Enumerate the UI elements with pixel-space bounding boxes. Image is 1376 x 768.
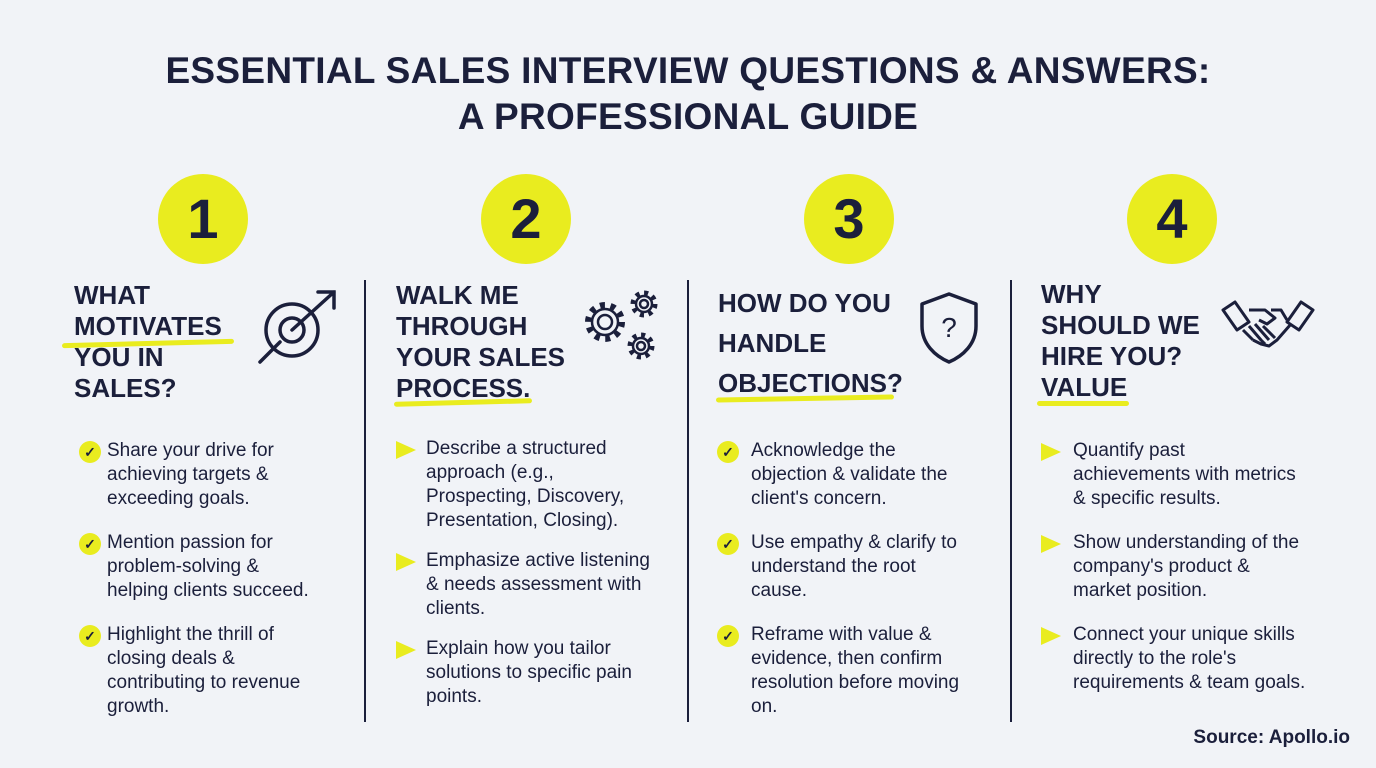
bullet list 1: achieving targets &: [107, 464, 269, 485]
bullet list 4: achievements with metrics: [1073, 464, 1296, 485]
title: ESSENTIAL SALES INTERVIEW QUESTIONS & ANSWERS:: [165, 50, 1211, 91]
heading 4: WHY: [1041, 279, 1102, 309]
number circle 1: 1: [187, 187, 219, 250]
number circle 3: [804, 174, 894, 264]
heading 4: HIRE YOU?: [1041, 341, 1182, 371]
bullet list 2: Emphasize active listening: [426, 550, 650, 571]
bullet list 2: [396, 438, 650, 707]
bullet list 3: Reframe with value &: [751, 624, 932, 645]
icon: shield question: ?: [941, 312, 957, 343]
bullet list 3: Use empathy & clarify to: [751, 532, 957, 553]
icon: target arrow: [258, 290, 336, 364]
bullet list 4: directly to the role's: [1073, 648, 1236, 669]
bullet list 1: helping clients succeed.: [107, 580, 309, 601]
heading 4: SHOULD WE: [1041, 310, 1200, 340]
title: [165, 50, 1211, 137]
heading 2: WALK ME: [396, 280, 519, 310]
bullet list 1: Mention passion for: [107, 532, 273, 553]
panel: motivation: [62, 280, 336, 717]
panel: why hire: [1037, 279, 1315, 693]
bullet list 4: Quantify past: [1073, 440, 1185, 461]
bullet list 3: evidence, then confirm: [751, 648, 942, 669]
bullet list 3: cause.: [751, 580, 807, 601]
bullet list 2: & needs assessment with: [426, 574, 641, 595]
bullet list 4: Show understanding of the: [1073, 532, 1299, 553]
bullet list 4: Connect your unique skills: [1073, 624, 1295, 645]
bullet list 1: closing deals &: [107, 648, 235, 669]
icon: gears: [585, 290, 658, 360]
heading 2: [394, 280, 565, 407]
heading 3: HOW DO YOU: [718, 288, 891, 318]
number circle 2: [481, 174, 571, 264]
number circle 3: 3: [833, 187, 865, 250]
bullet list 2: solutions to specific pain: [426, 662, 632, 683]
heading 1: SALES?: [74, 373, 177, 403]
heading 3: OBJECTIONS?: [718, 368, 903, 398]
bullet list 1: exceeding goals.: [107, 488, 250, 509]
bullet list 2: Prospecting, Discovery,: [426, 486, 624, 507]
bullet list 3: on.: [751, 696, 777, 717]
heading 2: THROUGH: [396, 311, 527, 341]
icon: handshake: [1221, 300, 1315, 348]
panel: objections: [716, 288, 978, 717]
bullet list 2: approach (e.g.,: [426, 462, 554, 483]
bullet list 4: requirements & team goals.: [1073, 672, 1305, 693]
bullet list 1: ✓: [84, 536, 96, 552]
source note: Source: Apollo.io: [1193, 727, 1350, 748]
bullet list 2: Explain how you tailor: [426, 638, 611, 659]
number circle 2: 2: [510, 187, 542, 250]
bullet list 4: [1041, 440, 1305, 693]
bullet list 1: ✓: [84, 444, 96, 460]
bullet list 2: Presentation, Closing).: [426, 510, 618, 531]
title: A PROFESSIONAL GUIDE: [458, 96, 918, 137]
bullet list 3: client's concern.: [751, 488, 887, 509]
bullet list 2: Describe a structured: [426, 438, 607, 459]
bullet list 3: ✓: [722, 444, 734, 460]
heading 1: [62, 280, 234, 403]
heading 1: MOTIVATES: [74, 311, 222, 341]
bullet list 3: understand the root: [751, 556, 916, 577]
bullet list 3: [717, 440, 959, 717]
bullet list 4: company's product &: [1073, 556, 1250, 577]
bullet list 4: & specific results.: [1073, 488, 1221, 509]
heading 3: [716, 288, 903, 402]
bullet list 3: ✓: [722, 628, 734, 644]
heading 2: PROCESS.: [396, 373, 530, 403]
bullet list 4: market position.: [1073, 580, 1207, 601]
panel: sales process: [394, 280, 658, 707]
bullet list 1: Share your drive for: [107, 440, 274, 461]
bullet list 1: Highlight the thrill of: [107, 624, 274, 645]
bullet list 3: ✓: [722, 536, 734, 552]
heading 1: WHAT: [74, 280, 150, 310]
heading 3: HANDLE: [718, 328, 826, 358]
bullet list 1: ✓: [84, 628, 96, 644]
heading 4: VALUE: [1041, 372, 1127, 402]
bullet list 2: clients.: [426, 598, 485, 619]
heading 2: YOUR SALES: [396, 342, 565, 372]
bullet list 1: problem-solving &: [107, 556, 259, 577]
bullet list 1: [79, 440, 309, 717]
number circle 4: [1127, 174, 1217, 264]
bullet list 3: Acknowledge the: [751, 440, 896, 461]
icon: shield question: [920, 292, 978, 364]
heading 4: [1037, 279, 1200, 406]
bullet list 2: points.: [426, 686, 482, 707]
number circle 4: 4: [1156, 187, 1188, 250]
bullet list 1: contributing to revenue: [107, 672, 300, 693]
heading 1: YOU IN: [74, 342, 164, 372]
number circle 1: [158, 174, 248, 264]
bullet list 3: objection & validate the: [751, 464, 947, 485]
bullet list 1: growth.: [107, 696, 169, 717]
bullet list 3: resolution before moving: [751, 672, 959, 693]
